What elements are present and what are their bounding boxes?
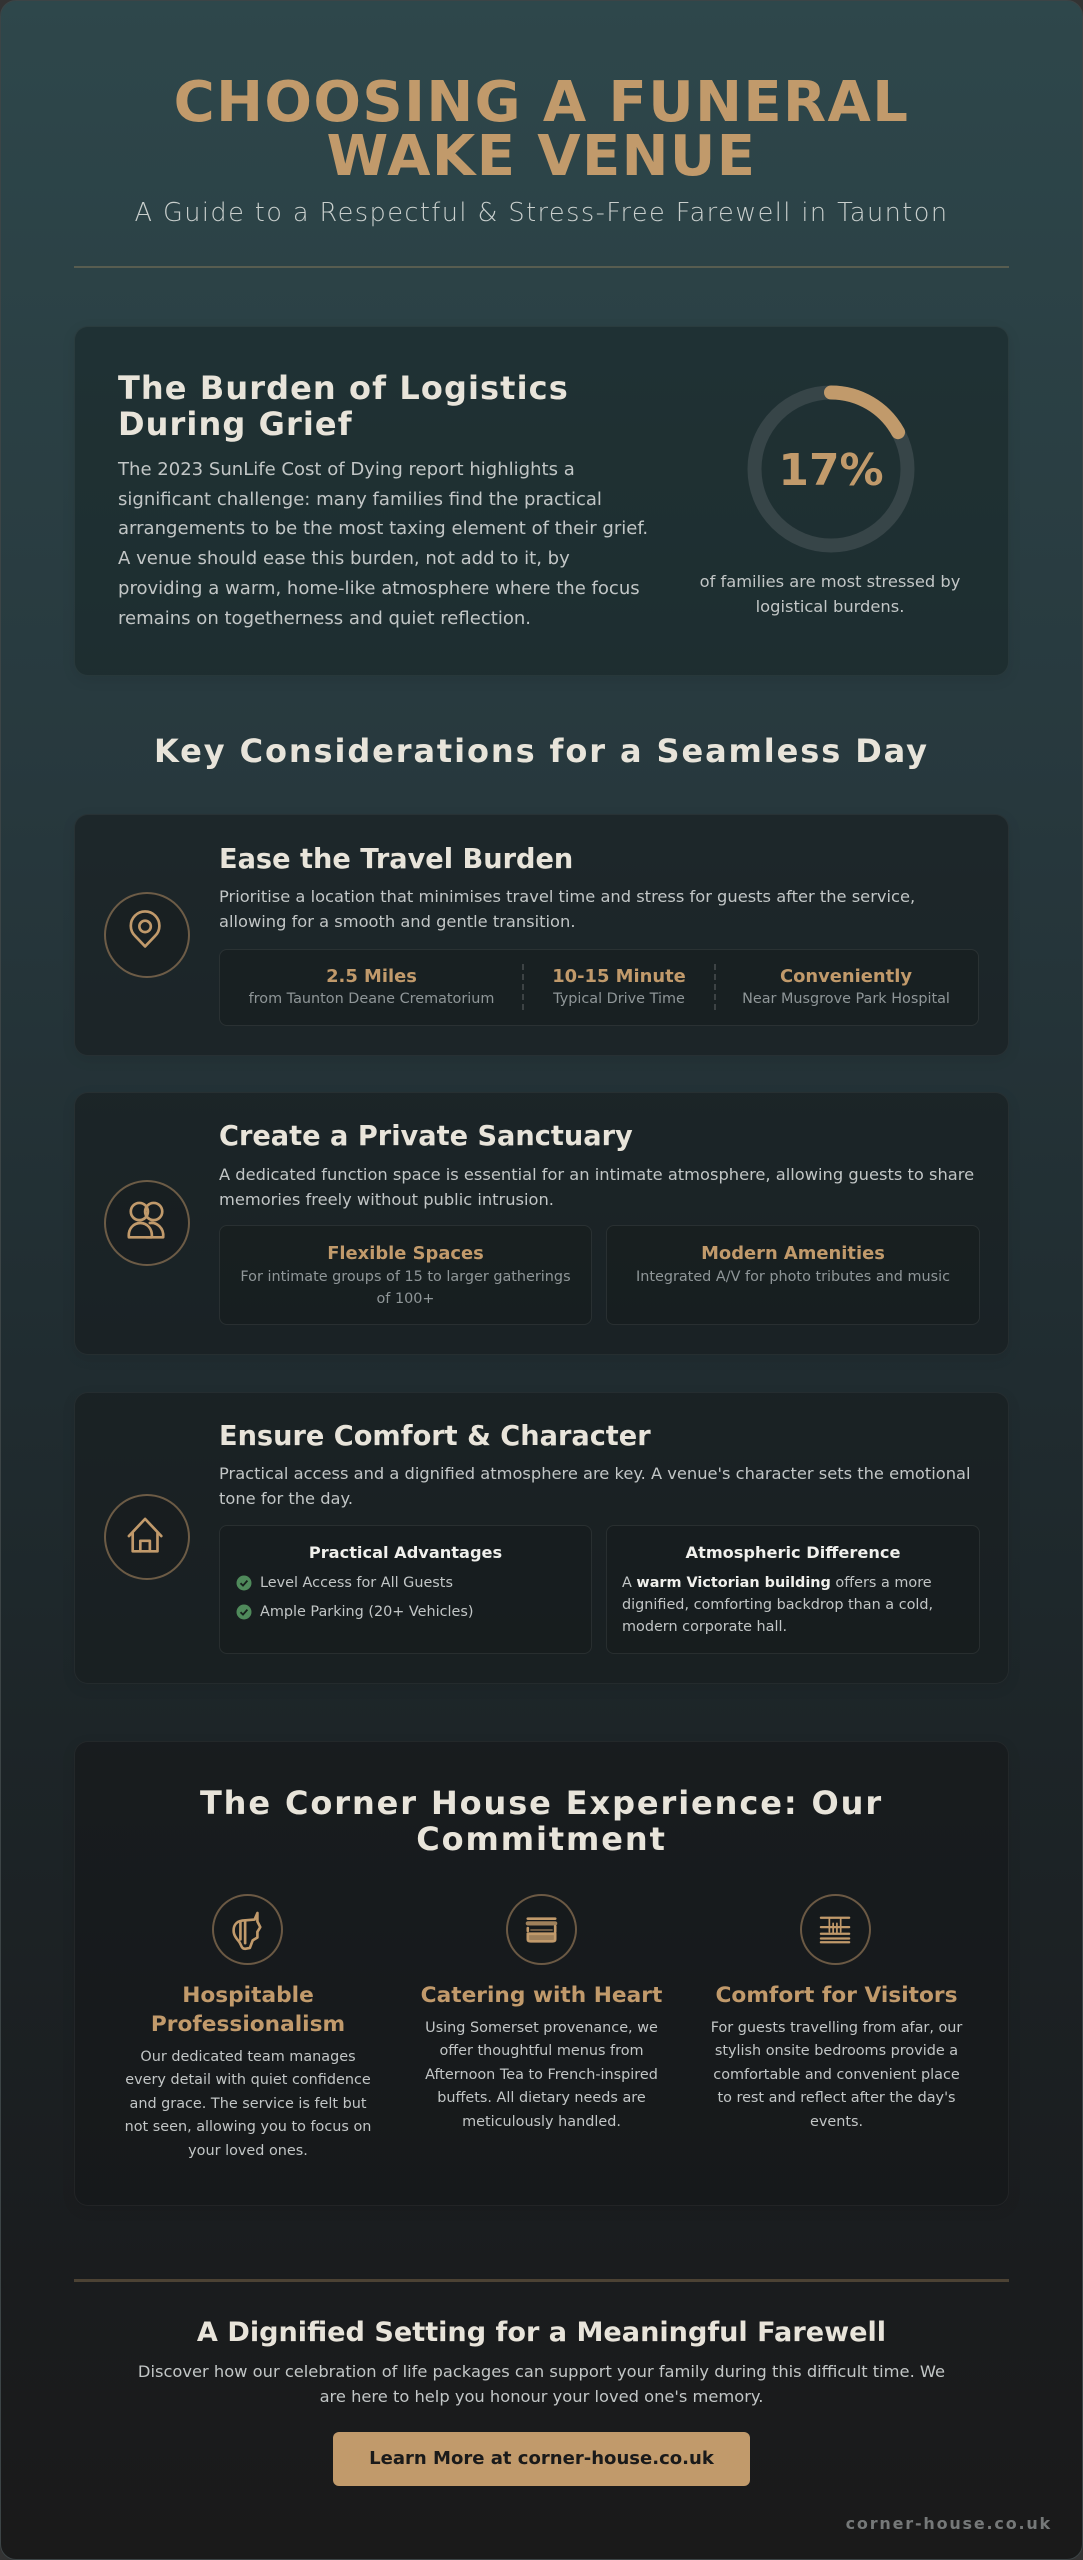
donut chart: 17%: [748, 386, 914, 552]
title: WAKE VENUE: [327, 124, 756, 189]
description: [219, 887, 915, 931]
feature text: Using Somerset provenance, we: [425, 2020, 658, 2036]
feature title: Hospitable: [182, 1982, 314, 2008]
description: [219, 1464, 971, 1508]
subtitle: A Guide to a Respectful & Stress-Free Farewell in Taunton: [135, 198, 948, 228]
panel heading: [118, 369, 569, 443]
box text: dignified, comforting backdrop than a cold,: [622, 1597, 933, 1613]
button: [333, 2432, 750, 2486]
box text: For intimate groups of 15 to larger gatherings: [240, 1269, 571, 1285]
feature: catering with heart: [421, 1982, 662, 2130]
feature text: and grace. The service is felt but: [130, 2096, 366, 2112]
feature: hospitable professionalism: [125, 1982, 371, 2158]
box title: Modern Amenities: [701, 1243, 885, 1264]
feature text: your loved ones.: [188, 2142, 308, 2158]
closing text: are here to help you honour your loved one's memory.: [320, 2387, 763, 2406]
donut caption: of families are most stressed by: [700, 572, 960, 591]
feature text: [125, 2048, 371, 2158]
panel: comfort and character: [74, 1392, 1009, 1684]
box: flexible spaces: [219, 1225, 592, 1325]
box text: [622, 1575, 933, 1635]
panel body text: significant challenge: many families find the practical: [118, 489, 602, 510]
feature text: [425, 2020, 658, 2130]
panel body text: [118, 459, 648, 629]
list item: parking: Ample Parking (20+ Vehicles): [260, 1604, 473, 1620]
feature text: Afternoon Tea to French-inspired: [425, 2066, 658, 2082]
heading: Ease the Travel Burden: [219, 844, 573, 875]
feature text: Our dedicated team manages: [140, 2048, 356, 2064]
description: allowing for a smooth and gentle transition.: [219, 912, 576, 931]
heading: Create a Private Sanctuary: [219, 1121, 633, 1152]
panel heading: The Burden of Logistics: [118, 369, 569, 407]
title: CHOOSING A FUNERAL: [174, 70, 909, 135]
section heading: Key Considerations for a Seamless Day: [154, 732, 929, 770]
box text: of 100+: [376, 1291, 434, 1307]
box text: A warm Victorian building offers a more: [622, 1575, 932, 1591]
panel body text: providing a warm, home-like atmosphere where the focus: [118, 578, 640, 599]
box text: [240, 1269, 571, 1307]
description: [219, 1165, 974, 1209]
button: Learn More at corner-house.co.uk: [369, 2448, 714, 2469]
box title: Atmospheric Difference: [686, 1543, 900, 1562]
panel body text: A venue should ease this burden, not add to it, by: [118, 548, 570, 569]
heading: Ensure Comfort & Character: [219, 1421, 651, 1452]
feature text: comfortable and convenient place: [713, 2066, 960, 2082]
feature title: [151, 1982, 345, 2036]
stat: distance: from Taunton Deane Crematorium: [249, 991, 494, 1007]
icon: catering: [506, 1894, 577, 1965]
box: atmospheric difference: [606, 1525, 980, 1654]
feature text: For guests travelling from afar, our: [711, 2020, 962, 2036]
icon: people: [104, 1180, 190, 1266]
feature: comfort for visitors: [711, 1982, 962, 2130]
feature text: not seen, allowing you to focus on: [125, 2119, 371, 2135]
panel: corner house experience: [74, 1741, 1009, 2206]
stat: hospital: Conveniently: [780, 966, 912, 987]
icon: house: [104, 1494, 190, 1580]
panel body text: remains on togetherness and quiet reflection.: [118, 608, 531, 629]
description: Prioritise a location that minimises travel time and stress for guests after the service,: [219, 887, 915, 906]
feature text: buffets. All dietary needs are: [437, 2090, 646, 2106]
feature title: Catering with Heart: [421, 1982, 662, 2008]
description: A dedicated function space is essential for an intimate atmosphere, allowing guests to share: [219, 1165, 974, 1184]
stat: distance: [248, 966, 494, 1007]
feature text: meticulously handled.: [462, 2114, 621, 2130]
panel: burden of logistics: [74, 326, 1009, 676]
travel stats box: [219, 949, 979, 1026]
closing text: [138, 2362, 945, 2406]
feature text: to rest and reflect after the day's: [717, 2090, 956, 2106]
stat: hospital: [742, 966, 950, 1007]
panel heading: The Corner House Experience: Our: [200, 1784, 883, 1822]
stat: hospital: Near Musgrove Park Hospital: [742, 991, 950, 1007]
feature text: events.: [810, 2114, 863, 2130]
icon: map pin: [104, 892, 190, 978]
description: Practical access and a dignified atmosphere are key. A venue's character sets the emotional: [219, 1464, 971, 1483]
stat: drive time: Typical Drive Time: [553, 991, 685, 1007]
description: memories freely without public intrusion.: [219, 1190, 554, 1209]
title: [174, 70, 909, 189]
donut caption: [700, 572, 960, 616]
box text: modern corporate hall.: [622, 1619, 787, 1635]
description: tone for the day.: [219, 1489, 353, 1508]
feature text: offer thoughtful menus from: [439, 2043, 644, 2059]
stat: drive time: [552, 966, 686, 1007]
box: practical advantages: [219, 1525, 592, 1654]
panel heading: [200, 1784, 883, 1858]
icon: megaphone: [212, 1894, 283, 1965]
donut chart: 17%: 17%: [778, 445, 884, 496]
panel body text: arrangements to be the most taxing element of their grief.: [118, 518, 648, 539]
feature text: stylish onsite bedrooms provide a: [715, 2043, 958, 2059]
panel heading: Commitment: [416, 1820, 667, 1858]
icon: bedroom: [800, 1894, 871, 1965]
donut caption: logistical burdens.: [756, 597, 904, 616]
panel: private sanctuary: [74, 1092, 1009, 1355]
panel body text: The 2023 SunLife Cost of Dying report highlights a: [118, 459, 575, 480]
stat: drive time: 10-15 Minute: [552, 966, 686, 987]
list item: level access: Level Access for All Guests: [260, 1575, 453, 1591]
box title: Practical Advantages: [309, 1543, 502, 1562]
box text: Integrated A/V for photo tributes and music: [636, 1269, 950, 1285]
panel: travel burden: [74, 814, 1009, 1056]
closing text: Discover how our celebration of life packages can support your family during this difficult time. We: [138, 2362, 945, 2381]
box: modern amenities: [606, 1225, 980, 1325]
stat: distance: 2.5 Miles: [326, 966, 417, 987]
closing heading: A Dignified Setting for a Meaningful Farewell: [197, 2317, 886, 2348]
box title: Flexible Spaces: [327, 1243, 484, 1264]
feature title: Comfort for Visitors: [716, 1982, 958, 2008]
feature text: every detail with quiet confidence: [125, 2072, 371, 2088]
panel heading: During Grief: [118, 405, 353, 443]
feature text: [711, 2020, 962, 2130]
footer url: corner-house.co.uk: [846, 2514, 1052, 2533]
feature title: Professionalism: [151, 2012, 345, 2036]
